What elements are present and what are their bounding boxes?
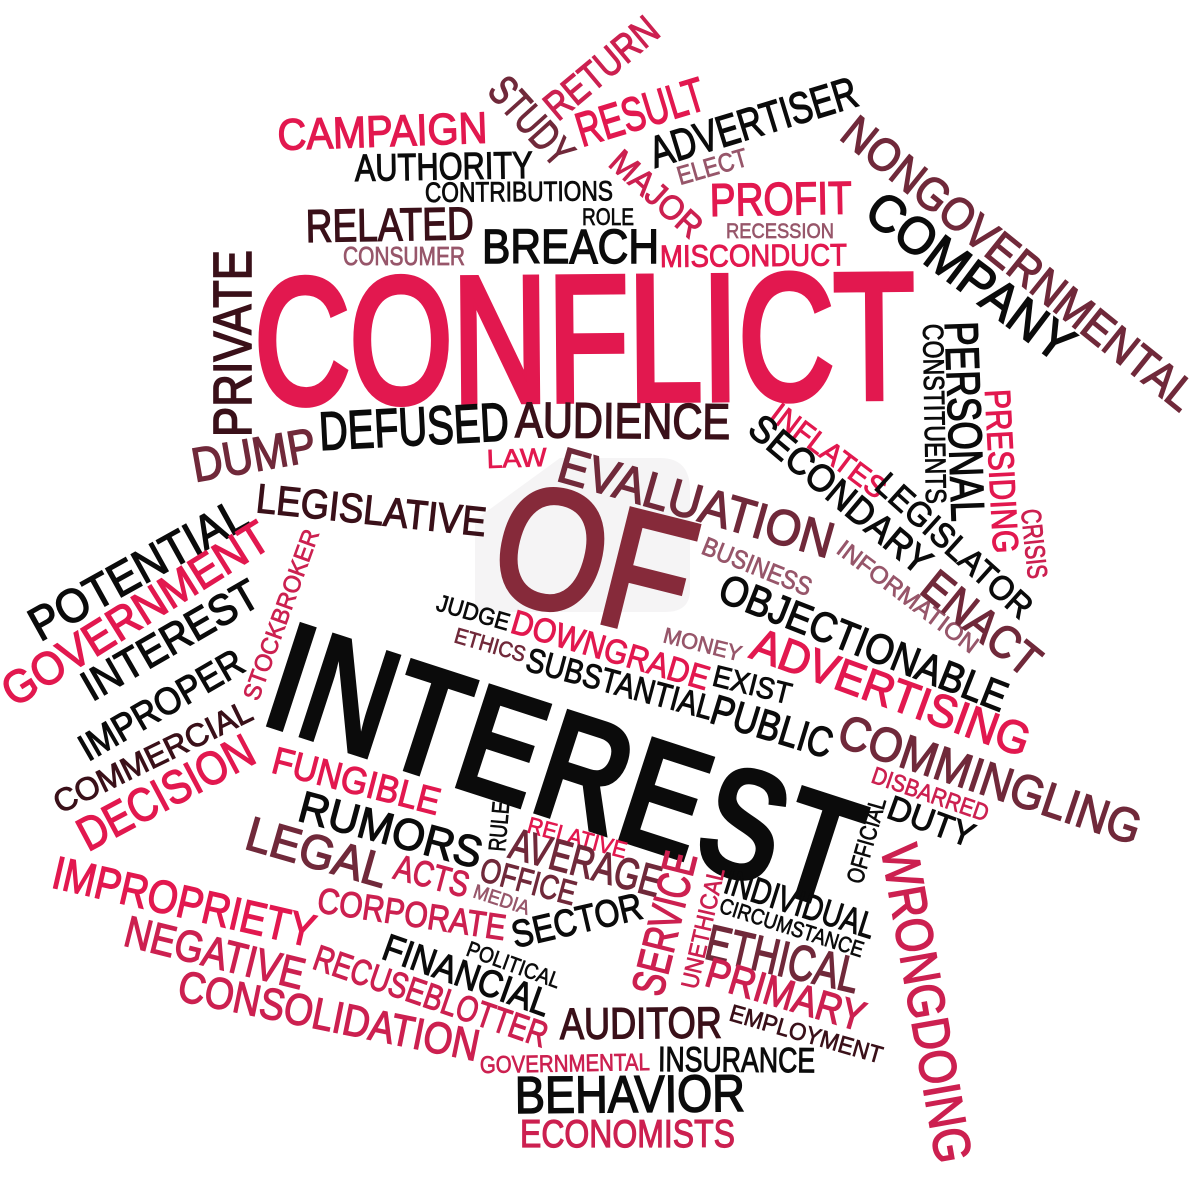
word: INTEREST (small): INTEREST bbox=[73, 571, 268, 711]
word: COMMINGLING: COMMINGLING bbox=[832, 705, 1148, 856]
word: NEGATIVE: NEGATIVE bbox=[120, 907, 310, 999]
word: DUTY: DUTY bbox=[882, 789, 980, 855]
word: PERSONAL: PERSONAL bbox=[935, 320, 995, 522]
word: CORPORATE: CORPORATE bbox=[315, 879, 509, 948]
word: FUNGIBLE: FUNGIBLE bbox=[268, 740, 445, 824]
word: LAW: LAW bbox=[486, 442, 548, 474]
word: MISCONDUCT: MISCONDUCT bbox=[660, 237, 847, 274]
word: RUMORS: RUMORS bbox=[293, 782, 488, 878]
word: RELATIVE: RELATIVE bbox=[525, 812, 630, 863]
word: COMMERCIAL: COMMERCIAL bbox=[47, 693, 258, 820]
word: SERVICE: SERVICE bbox=[621, 846, 707, 1000]
word: AVERAGE: AVERAGE bbox=[504, 819, 667, 907]
word: CONSTITUENTS: CONSTITUENTS bbox=[916, 324, 951, 504]
word: LEGAL: LEGAL bbox=[240, 808, 394, 899]
word: DECISION: DECISION bbox=[68, 723, 263, 861]
word: OFFICIAL: OFFICIAL bbox=[842, 795, 892, 887]
word: RELATED: RELATED bbox=[305, 197, 474, 252]
title word: OF: OF bbox=[475, 445, 713, 677]
word: EXIST: EXIST bbox=[709, 660, 795, 711]
word: CONSOLIDATION: CONSOLIDATION bbox=[174, 962, 484, 1071]
word: ENACT: ENACT bbox=[912, 559, 1052, 687]
word: SUBSTANTIAL: SUBSTANTIAL bbox=[522, 641, 717, 727]
word: MEDIA: MEDIA bbox=[470, 881, 533, 920]
word: AUTHORITY: AUTHORITY bbox=[354, 145, 533, 190]
word: STUDY: STUDY bbox=[479, 67, 584, 175]
word: ECONOMISTS: ECONOMISTS bbox=[520, 1113, 735, 1156]
word: IMPROPRIETY: IMPROPRIETY bbox=[48, 846, 321, 957]
word: COMPANY: COMPANY bbox=[855, 180, 1085, 374]
word: ETHICS: ETHICS bbox=[452, 623, 529, 667]
word: GOVERNMENTAL: GOVERNMENTAL bbox=[480, 1049, 650, 1079]
word: UNETHICAL: UNETHICAL bbox=[677, 865, 731, 991]
word: RECESSION: RECESSION bbox=[726, 220, 834, 243]
word: EVALUATION: EVALUATION bbox=[552, 437, 840, 569]
word: ETHICAL: ETHICAL bbox=[701, 914, 865, 1004]
word: CRISIS: CRISIS bbox=[1015, 507, 1053, 580]
title word: CONFLICT: CONFLICT bbox=[254, 236, 915, 441]
word: RECUSEBLOTTER: RECUSEBLOTTER bbox=[308, 937, 553, 1055]
word: EMPLOYMENT: EMPLOYMENT bbox=[726, 1000, 886, 1069]
word: GOVERNMENT: GOVERNMENT bbox=[0, 510, 279, 716]
watermark: faint house icon bbox=[475, 458, 690, 612]
word: AUDIENCE: AUDIENCE bbox=[515, 392, 730, 450]
word: DEFUSED: DEFUSED bbox=[317, 392, 510, 462]
word: PRIVATE: PRIVATE bbox=[203, 250, 263, 437]
word: DISBARRED: DISBARRED bbox=[868, 762, 992, 827]
word: SECONDARY: SECONDARY bbox=[740, 407, 940, 584]
word: PUBLIC: PUBLIC bbox=[705, 686, 839, 767]
word: LEGISLATOR: LEGISLATOR bbox=[868, 466, 1040, 626]
word: CAMPAIGN: CAMPAIGN bbox=[277, 104, 488, 160]
word: CONSUMER: CONSUMER bbox=[343, 241, 465, 271]
word: SECTOR: SECTOR bbox=[508, 886, 647, 957]
word: CIRCUMSTANCE: CIRCUMSTANCE bbox=[716, 893, 867, 962]
word: LEGISLATIVE: LEGISLATIVE bbox=[254, 475, 489, 545]
word: ACTS: ACTS bbox=[390, 846, 474, 905]
word: MAJOR: MAJOR bbox=[602, 143, 710, 246]
word: POTENTIAL: POTENTIAL bbox=[19, 487, 257, 651]
word: OFFICE: OFFICE bbox=[476, 851, 580, 913]
word: AUDITOR: AUDITOR bbox=[560, 999, 722, 1049]
word: INSURANCE: INSURANCE bbox=[658, 1040, 815, 1080]
word: RULE: RULE bbox=[484, 800, 515, 853]
word: DOWNGRADE: DOWNGRADE bbox=[507, 603, 714, 698]
word: CONTRIBUTIONS: CONTRIBUTIONS bbox=[425, 175, 613, 208]
word: POLITICAL: POLITICAL bbox=[463, 936, 564, 993]
word: DUMP: DUMP bbox=[188, 419, 320, 493]
word: PRIMARY: PRIMARY bbox=[700, 949, 871, 1040]
word: ROLE: ROLE bbox=[582, 204, 634, 231]
word: MONEY: MONEY bbox=[661, 623, 745, 666]
word: PRESIDING: PRESIDING bbox=[977, 388, 1027, 554]
word: BUSINESS: BUSINESS bbox=[698, 531, 817, 602]
word: INFLATES: INFLATES bbox=[764, 397, 892, 505]
word: STOCKBROKER: STOCKBROKER bbox=[238, 526, 325, 704]
word: PROFIT: PROFIT bbox=[709, 172, 852, 226]
word: ADVERTISER: ADVERTISER bbox=[644, 68, 864, 178]
title word: INTEREST: INTEREST bbox=[247, 586, 883, 945]
word: INDIVIDUAL: INDIVIDUAL bbox=[720, 861, 881, 947]
word: FINANCIAL: FINANCIAL bbox=[377, 927, 556, 1025]
word: JUDGE: JUDGE bbox=[433, 590, 513, 636]
word: IMPROPER: IMPROPER bbox=[72, 641, 252, 770]
word: ADVERTISING: ADVERTISING bbox=[745, 618, 1038, 767]
word: INFORMATION: INFORMATION bbox=[831, 535, 983, 659]
word: OBJECTIONABLE: OBJECTIONABLE bbox=[713, 565, 1015, 721]
word: BEHAVIOR: BEHAVIOR bbox=[515, 1065, 745, 1125]
word: RESULT: RESULT bbox=[570, 68, 711, 158]
word: ELECT: ELECT bbox=[673, 142, 751, 191]
word: BREACH: BREACH bbox=[482, 221, 659, 274]
